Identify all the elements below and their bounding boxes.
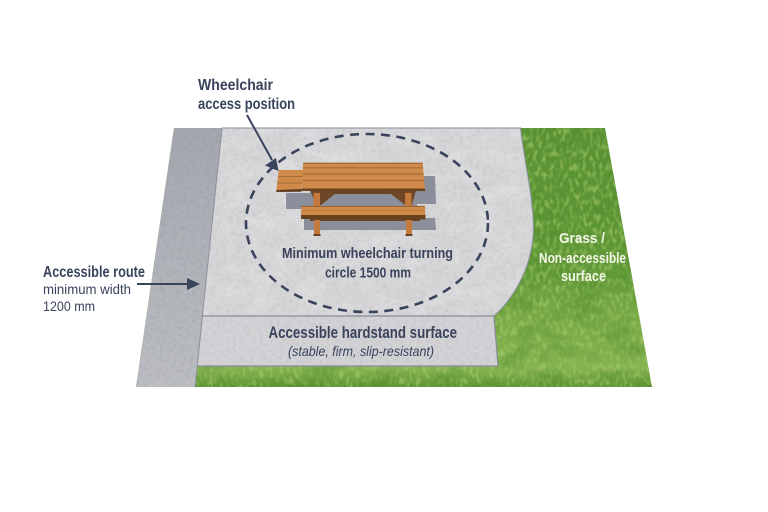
label: turning circle: circle 1500 mm xyxy=(325,264,411,282)
table shadow xyxy=(286,176,436,230)
label: accessible route xyxy=(43,264,145,314)
wheelchair extension tabletop xyxy=(276,170,303,192)
label: wheelchair access position: Wheelchair xyxy=(198,77,273,94)
label: grass surface: Non-accessible xyxy=(539,250,626,267)
picnic table xyxy=(276,163,426,236)
accessible hardstand main pad xyxy=(201,128,534,316)
label: wheelchair access position xyxy=(198,77,295,113)
bench seat xyxy=(301,206,426,220)
label: accessible route: minimum width xyxy=(43,281,131,297)
label: grass surface xyxy=(539,230,626,285)
label: grass surface: surface xyxy=(561,268,606,285)
grass surface xyxy=(136,128,652,387)
wheelchair turning circle xyxy=(246,134,488,312)
accessible route path xyxy=(136,128,222,387)
label: hardstand surface: Accessible hardstand surface xyxy=(268,324,457,342)
label: accessible route: 1200 mm xyxy=(43,298,95,314)
label: accessible route: Accessible route xyxy=(43,264,145,281)
arrow: to wheelchair access position xyxy=(247,115,278,171)
label: turning circle: Minimum wheelchair turning xyxy=(282,245,453,262)
accessible hardstand strip xyxy=(197,316,498,366)
label: wheelchair access position: access position xyxy=(198,96,295,113)
label: hardstand surface xyxy=(268,324,457,359)
arrow: to accessible route xyxy=(137,278,200,290)
label: hardstand surface: (stable, firm, slip-resistant) xyxy=(288,343,434,359)
main tabletop xyxy=(302,163,425,191)
label: turning circle xyxy=(282,245,453,282)
label: grass surface: Grass / xyxy=(559,230,606,247)
table legs and frame xyxy=(309,190,420,236)
